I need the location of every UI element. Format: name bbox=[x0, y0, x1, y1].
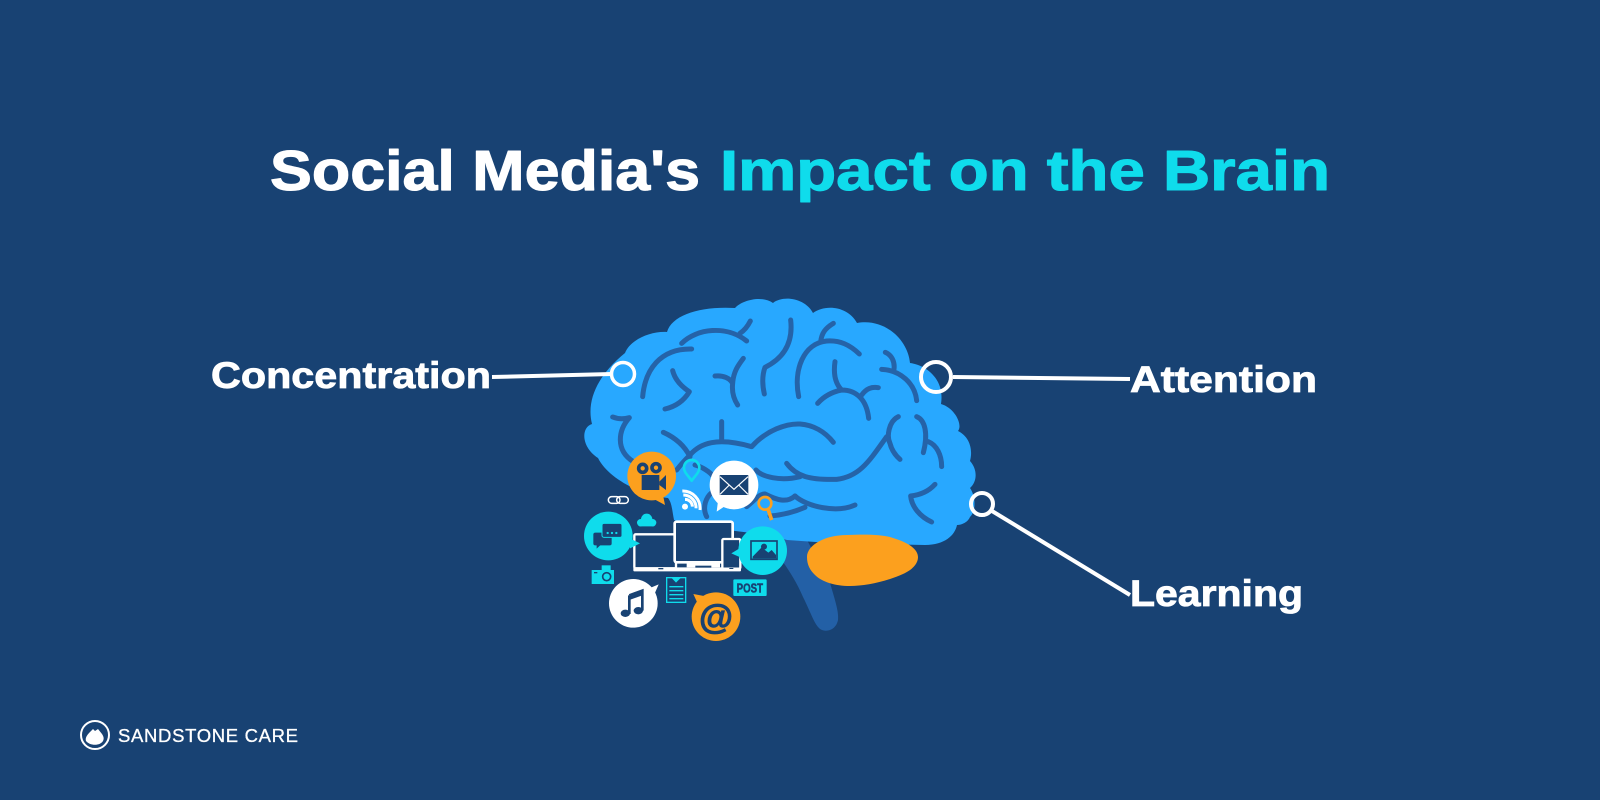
icon: photo camera bbox=[592, 565, 614, 584]
cerebellum bbox=[807, 535, 918, 586]
device: laptop bbox=[633, 534, 741, 571]
icon: at-sign bubble: @ bbox=[699, 599, 733, 637]
icon: cloud bbox=[637, 514, 656, 526]
device: monitor bbox=[675, 522, 733, 568]
callout: concentration: Concentration bbox=[211, 355, 491, 396]
icon: wifi bbox=[682, 491, 700, 510]
device: tablet bbox=[722, 539, 740, 569]
icon: post tag bbox=[733, 579, 767, 596]
callout: learning: Learning bbox=[1130, 573, 1303, 614]
icon: document bbox=[667, 578, 686, 602]
icon: mail bubble bbox=[710, 461, 758, 512]
callout: concentration bbox=[211, 355, 634, 396]
title bbox=[270, 139, 1330, 203]
lower brain folds bbox=[705, 484, 935, 522]
icon: magnifier bbox=[759, 497, 772, 520]
logo: Sandstone Care: SANDSTONE CARE bbox=[118, 725, 298, 746]
icon: at-sign bubble bbox=[692, 592, 740, 641]
callout: attention: Attention bbox=[1130, 359, 1317, 400]
brain illustration bbox=[584, 299, 976, 631]
brain stem bbox=[780, 535, 838, 631]
title: Impact on the Brain bbox=[720, 139, 1330, 203]
callout: attention bbox=[921, 359, 1317, 400]
icon: image bubble bbox=[731, 526, 787, 575]
logo: Sandstone Care bbox=[81, 721, 298, 749]
icon: music bubble bbox=[609, 579, 659, 628]
icon: location pin bbox=[684, 460, 699, 481]
cerebrum bbox=[584, 299, 976, 545]
icon: link bbox=[608, 497, 628, 503]
brain folds bbox=[613, 320, 942, 479]
callout: learning bbox=[971, 493, 1303, 614]
icon: video camera bubble bbox=[627, 452, 676, 505]
title: Social Media's bbox=[270, 139, 700, 203]
icon: post tag: POST bbox=[737, 581, 763, 595]
icon: chat bubble bbox=[584, 512, 640, 560]
social media icon cluster bbox=[584, 452, 787, 641]
